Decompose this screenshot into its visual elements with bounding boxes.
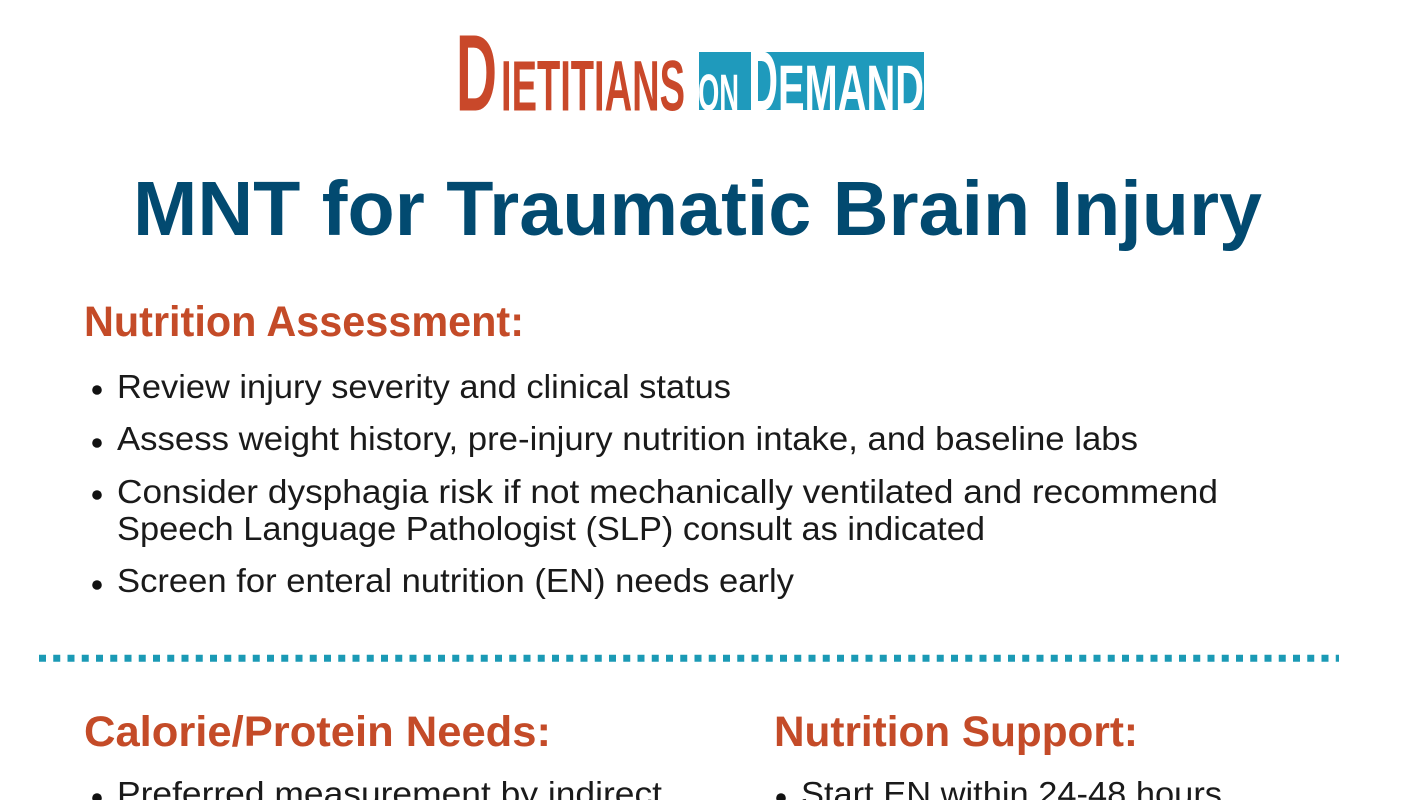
heading: nutrition support: Nutrition Support:: [774, 708, 1138, 756]
logo: Dietitians on Demand: IETITIANS: [501, 48, 685, 126]
bullet list: assessment items: Consider dysphagia risk if not mechanically ventilated and recommend: [117, 473, 1218, 510]
heading: nutrition assessment: Nutrition Assessment:: [84, 298, 524, 346]
title: MNT for Traumatic Brain Injury: [133, 166, 1262, 252]
logo: Dietitians on Demand: [456, 12, 924, 134]
bullet list: assessment items: Screen for enteral nutrition (EN) needs early: [117, 562, 795, 599]
logo: Dietitians on Demand: EMAND: [778, 52, 924, 124]
logo: Dietitians on Demand: ON: [698, 64, 739, 122]
bullet list: assessment items: Speech Language Pathologist (SLP) consult as indicated: [117, 510, 985, 547]
bullet list: assessment items: Review injury severity and clinical status: [117, 368, 731, 405]
logo: Dietitians on Demand: D: [749, 34, 778, 130]
panel: nutrition support: [774, 708, 1222, 800]
bullet list: assessment items: Assess weight history, pre-injury nutrition intake, and baseline labs: [117, 420, 1138, 457]
panel: calorie and protein needs: [84, 708, 662, 800]
bullet list: assessment items: [92, 368, 1218, 599]
panel: nutrition assessment: [84, 298, 1218, 599]
logo: Dietitians on Demand: D: [456, 12, 497, 134]
heading: calorie and protein needs: Calorie/Protein Needs:: [84, 708, 551, 756]
